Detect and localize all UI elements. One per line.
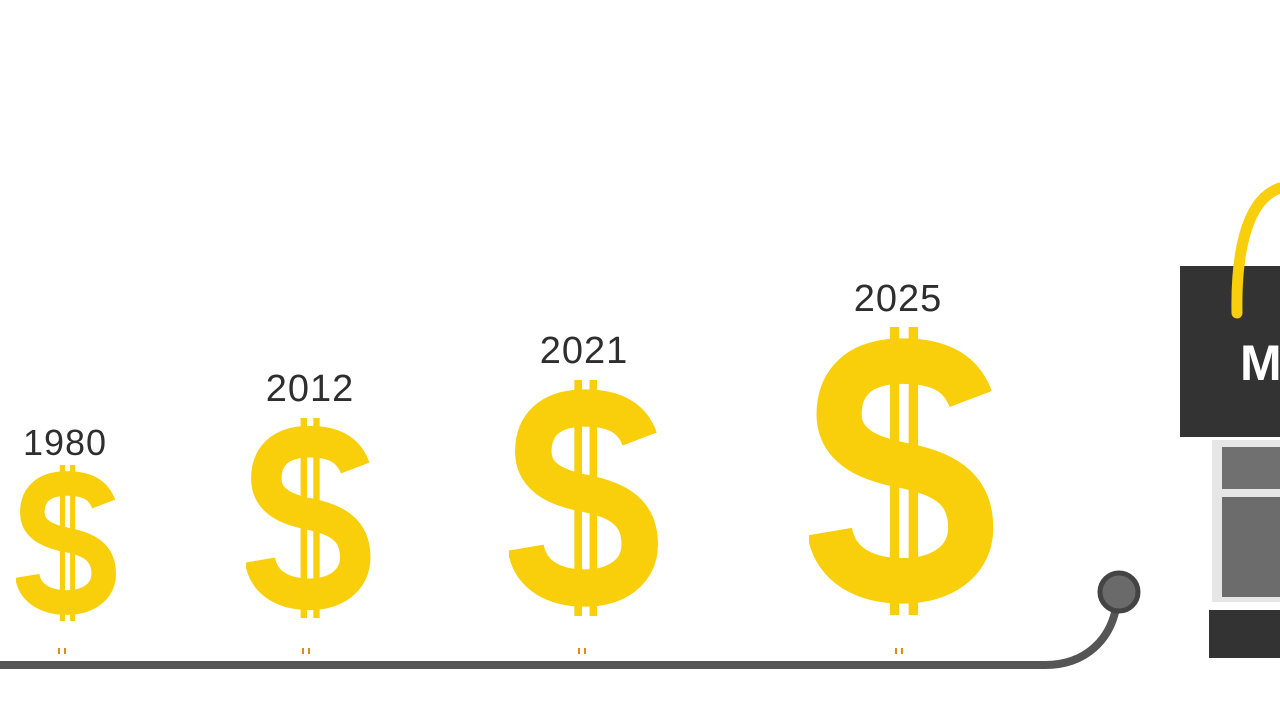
year label 2021: 2021 <box>540 330 628 372</box>
year label 2025: 2025 <box>854 278 942 320</box>
restaurant building <box>1180 182 1280 658</box>
dollar sign 2025 <box>809 327 994 615</box>
yellow arch <box>1231 182 1280 318</box>
base <box>1209 610 1280 658</box>
sign board with M <box>1180 266 1280 437</box>
dollar sign 2012 <box>246 418 370 618</box>
year label 2012: 2012 <box>266 368 354 410</box>
year label 1980: 1980 <box>23 422 107 463</box>
dollar sign 2021 <box>509 380 658 616</box>
windows <box>1212 440 1280 602</box>
dollar sign 1980 <box>16 465 116 621</box>
timeline line with end node <box>0 570 1140 669</box>
